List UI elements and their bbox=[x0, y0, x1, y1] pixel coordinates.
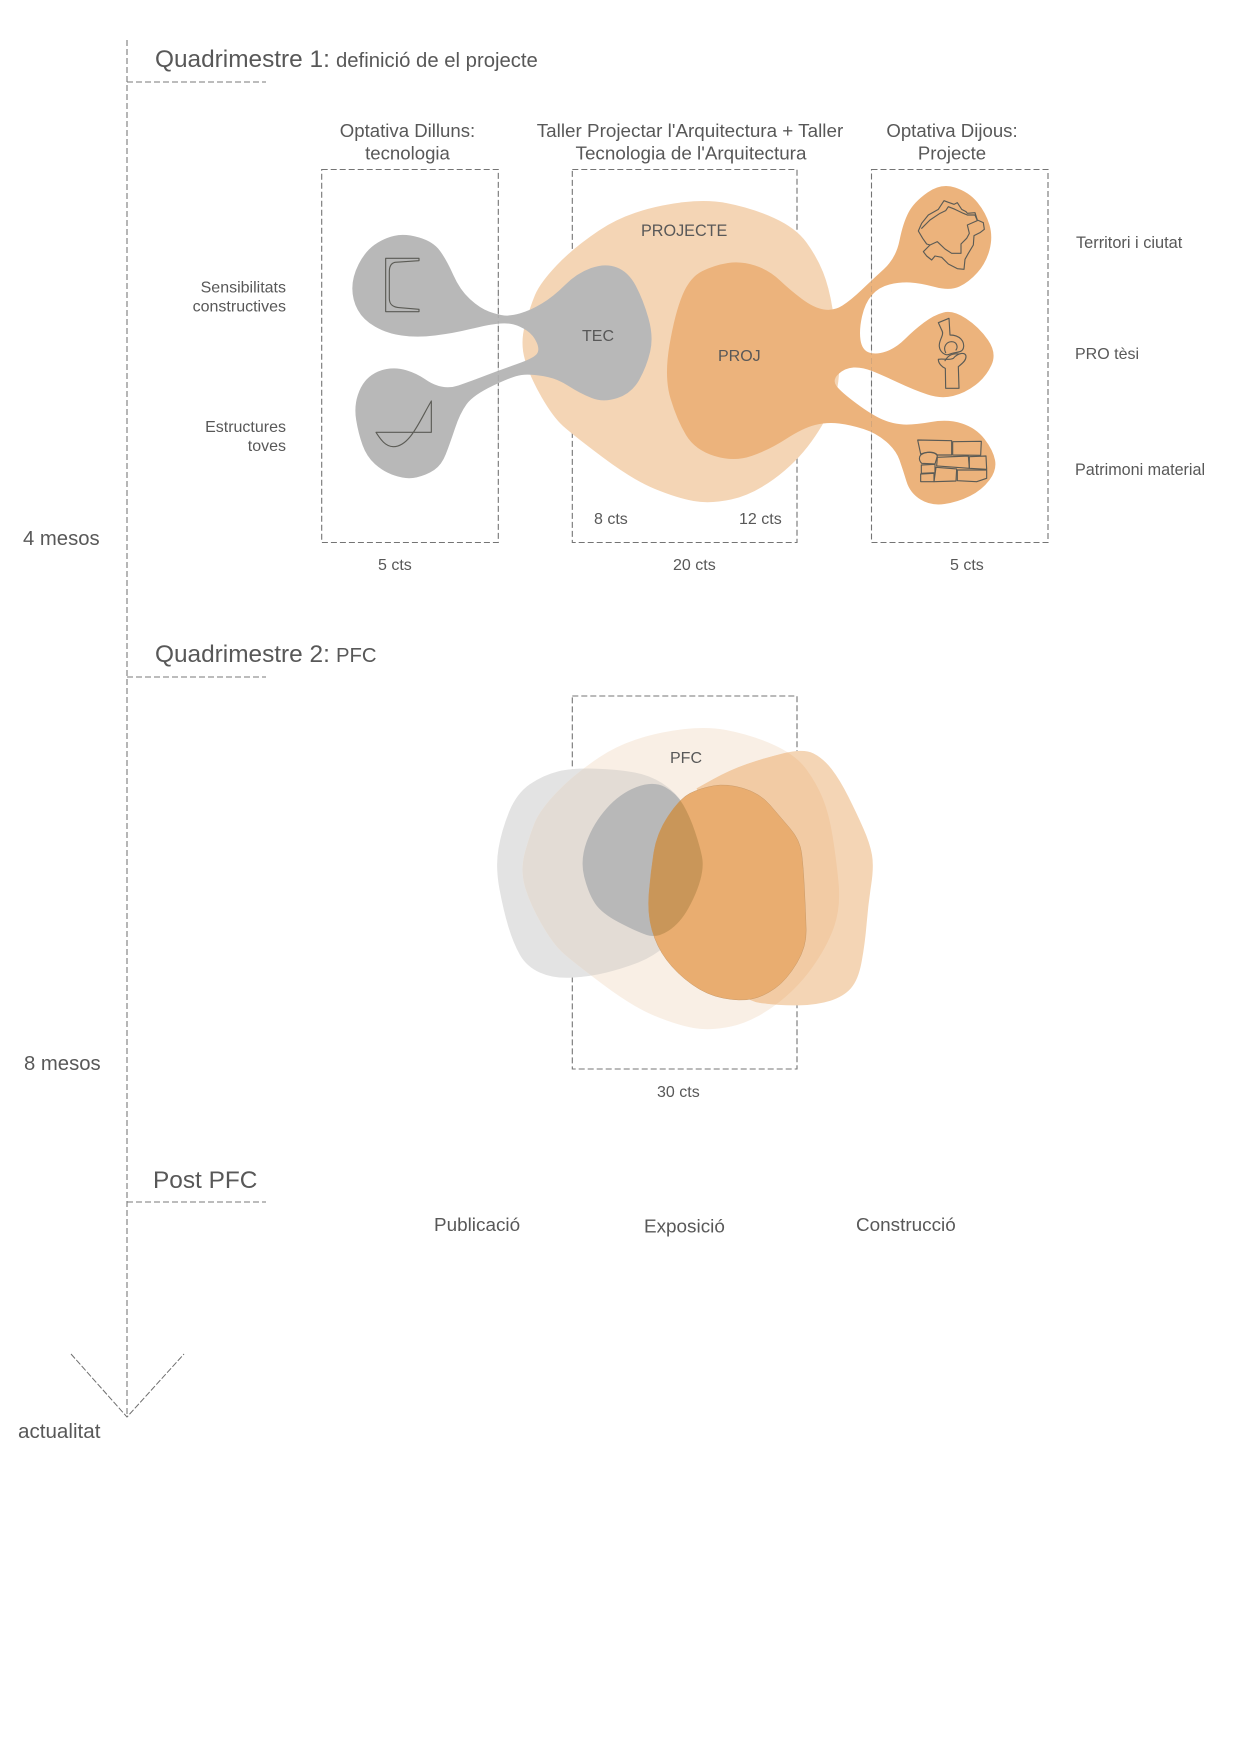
credits: 5 cts dijous: 5 cts bbox=[950, 557, 984, 574]
section heading: Quadrimestre 2 bbox=[127, 641, 377, 677]
grey TEC blob bbox=[583, 784, 703, 936]
section heading: Quadrimestre 1: Quadrimestre 1: bbox=[155, 46, 330, 73]
column heading: Taller: Tecnologia de l'Arquitectura bbox=[576, 142, 807, 164]
side label: Sensibilitats constructives: constructives bbox=[193, 298, 286, 316]
icon: stone wall bbox=[918, 440, 987, 482]
overlap of pale grey and pale orange bbox=[522, 768, 680, 976]
blob label: TEC: TEC bbox=[582, 328, 614, 345]
dashed box: optativa dilluns bbox=[322, 170, 498, 542]
overlap of medium and pale orange bbox=[696, 752, 839, 1005]
side label: Territori i ciutat: Territori i ciutat bbox=[1076, 234, 1183, 252]
dashed box: optativa dijous bbox=[872, 170, 1048, 542]
blob: TEC with two lobes bbox=[352, 235, 652, 478]
blob label: PROJ: PROJ bbox=[718, 348, 761, 365]
section heading: Quadrimestre 1: definició de el projecte bbox=[336, 50, 538, 72]
column heading: Optativa Dilluns: tecnologia bbox=[365, 142, 451, 164]
side label: Sensibilitats constructives: Sensibilitats bbox=[201, 280, 286, 296]
dashed box: PFC bbox=[572, 696, 797, 1069]
icon: U channel profile bbox=[386, 258, 419, 312]
pale orange blob bbox=[522, 728, 839, 1029]
side label: Patrimoni material: Patrimoni material bbox=[1075, 461, 1205, 479]
column heading: Optativa Dilluns: Optativa Dilluns: bbox=[340, 120, 475, 141]
diagram: PFC overlapping blobs bbox=[497, 728, 873, 1029]
icon: tensile structure curve bbox=[376, 401, 431, 447]
credits: 12 cts: 12 cts bbox=[739, 511, 782, 528]
section heading: Quadrimestre 2: PFC bbox=[336, 645, 377, 667]
icon: bone joint bbox=[938, 318, 966, 388]
dashed box: taller bbox=[572, 170, 797, 542]
outcome: Publicació: Publicació bbox=[434, 1215, 520, 1236]
credits: 30 cts: 30 cts bbox=[657, 1084, 700, 1101]
credits: 20 cts: 20 cts bbox=[673, 557, 716, 574]
outcome: Construcció: Construcció bbox=[856, 1215, 956, 1236]
column heading: Optativa Dijous: Projecte bbox=[918, 142, 986, 164]
blob label: PROJECTE: PROJECTE bbox=[641, 222, 728, 240]
side label: Estructures toves: Estructures bbox=[205, 419, 286, 436]
side label: Estructures toves: toves bbox=[248, 438, 286, 455]
icon: territory contour bbox=[918, 201, 984, 269]
overlap of TEC and PROJ bbox=[648, 801, 703, 936]
section heading: Post PFC bbox=[127, 1167, 266, 1202]
section heading: Quadrimestre 2: Quadrimestre 2: bbox=[155, 641, 330, 668]
section heading: Quadrimestre 1 bbox=[127, 46, 538, 82]
time label: 8 mesos: 8 mesos bbox=[24, 1053, 101, 1075]
column heading: Taller: Taller Projectar l'Arquitectura + Taller bbox=[537, 120, 843, 141]
credits: 5 cts dilluns: 5 cts bbox=[378, 557, 412, 574]
credits: 8 cts: 8 cts bbox=[594, 511, 628, 528]
outcome: Exposició: Exposició bbox=[644, 1216, 725, 1238]
pale grey blob bbox=[497, 769, 703, 978]
medium orange blob bbox=[697, 751, 873, 1005]
blob label: PFC: PFC bbox=[670, 750, 702, 767]
column heading: Optativa Dijous: Optativa Dijous: bbox=[886, 120, 1018, 141]
time label: actualitat: actualitat bbox=[18, 1420, 101, 1443]
section heading: Post PFC: Post PFC bbox=[153, 1167, 257, 1194]
side label: PRO tèsi: PRO tèsi bbox=[1075, 346, 1139, 363]
blob: PROJECTE bbox=[522, 201, 839, 502]
time label: 4 mesos: 4 mesos bbox=[23, 528, 100, 550]
timeline arrow bbox=[71, 40, 184, 1417]
orange PROJ blob bbox=[649, 785, 806, 1000]
blob: PROJ with three lobes bbox=[667, 186, 995, 504]
box lines seen through the stems bbox=[498, 250, 872, 460]
